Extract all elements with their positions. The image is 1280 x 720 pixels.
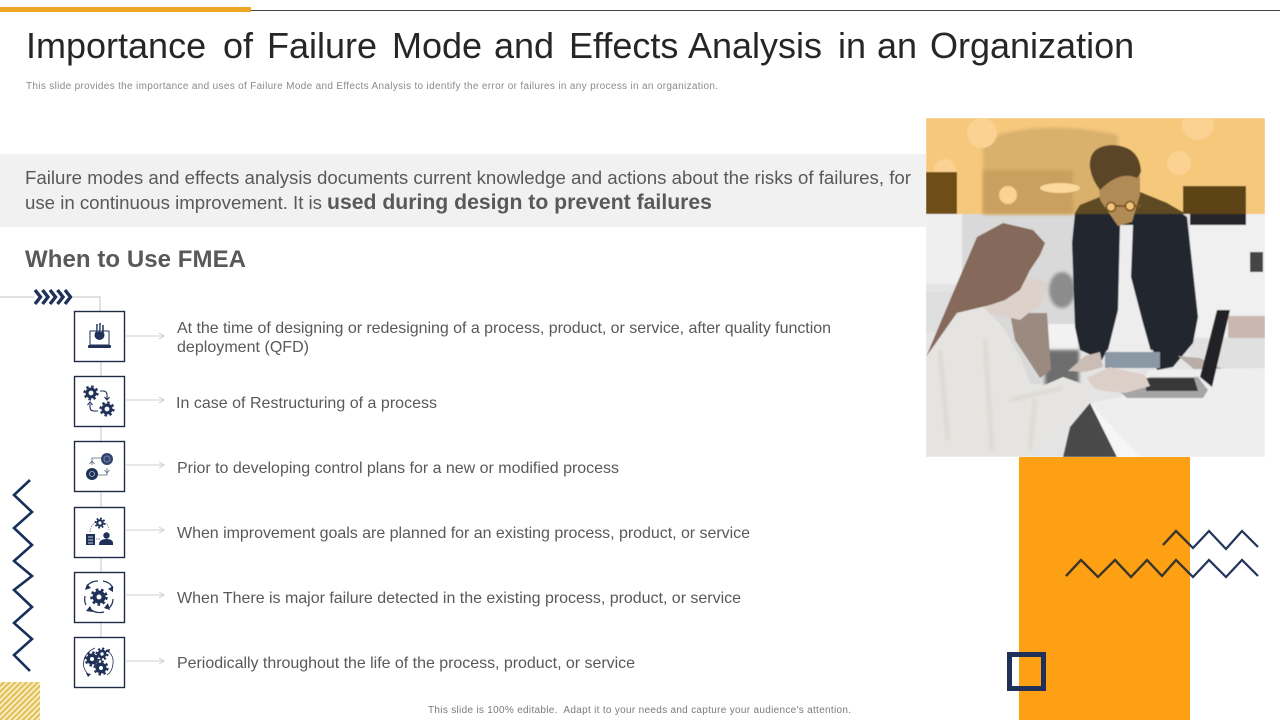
title: an [877,25,917,66]
title: in [838,25,866,66]
photo: two colleagues at a laptop [926,108,1265,457]
title: Failure [267,25,377,66]
photo background [926,213,1265,457]
list item 5 [74,572,741,622]
item text: Periodically throughout the life of the process, product, or service [177,655,635,672]
title: of [223,25,254,66]
summary text line 2: use in continuous improvement. It is [25,192,322,213]
arrow [125,592,164,598]
panel: summary band [0,154,926,227]
icon: gear cluster [74,638,124,688]
title: Mode [392,25,482,66]
decorative zigzag: left [14,480,32,671]
list item 4 [74,508,750,558]
decorative square [1010,654,1044,688]
top rule [0,7,1280,12]
icon: gears exchange [74,376,124,426]
item text: Prior to developing control plans for a new or modified process [177,460,619,477]
photo laptop [1120,310,1230,398]
footer note: This slide is 100% editable. Adapt it to your needs and capture your audience's attention. [428,705,851,716]
item text [177,320,831,356]
item text: In case of Restructuring of a process [176,395,437,412]
icon: laptop with power [74,312,124,362]
photo woman [926,223,1150,457]
title: and [494,25,554,66]
icon: gear cycle [74,572,124,622]
item text: When There is major failure detected in the existing process, product, or service [177,590,741,607]
icon: goal planning [74,508,124,558]
photo table [1063,368,1265,457]
photo tinted band [926,108,1265,214]
subtitle: This slide provides the importance and uses of Failure Mode and Effects Analysis to identify the error or failures in any process in an organization. [26,81,718,92]
icon: linked targets [74,442,124,492]
list item 6 [74,638,635,688]
icon: chevrons [35,290,70,304]
heading: when to use: When to Use FMEA [25,246,246,273]
arrow [125,462,164,468]
title: Organization [930,25,1134,66]
summary emphasis: used during design to prevent failures [327,191,712,214]
summary text line 1: Failure modes and effects analysis documents current knowledge and actions about the risks of failures, for [25,167,911,188]
arrow [125,658,164,664]
item text: deployment (QFD) [177,339,309,356]
title: Effects [569,25,678,66]
title: Analysis [688,25,822,66]
hatched corner [0,682,40,720]
item text: At the time of designing or redesigning of a process, product, or service, after quality function [177,320,831,337]
item text: When improvement goals are planned for an existing process, product, or service [177,525,750,542]
list item 2 [74,376,437,426]
timeline connector [0,297,101,637]
title: Importance [26,25,206,66]
orange column [1019,457,1190,720]
arrow [125,397,164,403]
list item 3 [74,442,619,492]
decorative zigzags: right [1066,531,1258,577]
arrow [125,333,164,339]
arrow [125,527,164,533]
photo man [1068,145,1235,375]
list item 1 [74,312,831,362]
